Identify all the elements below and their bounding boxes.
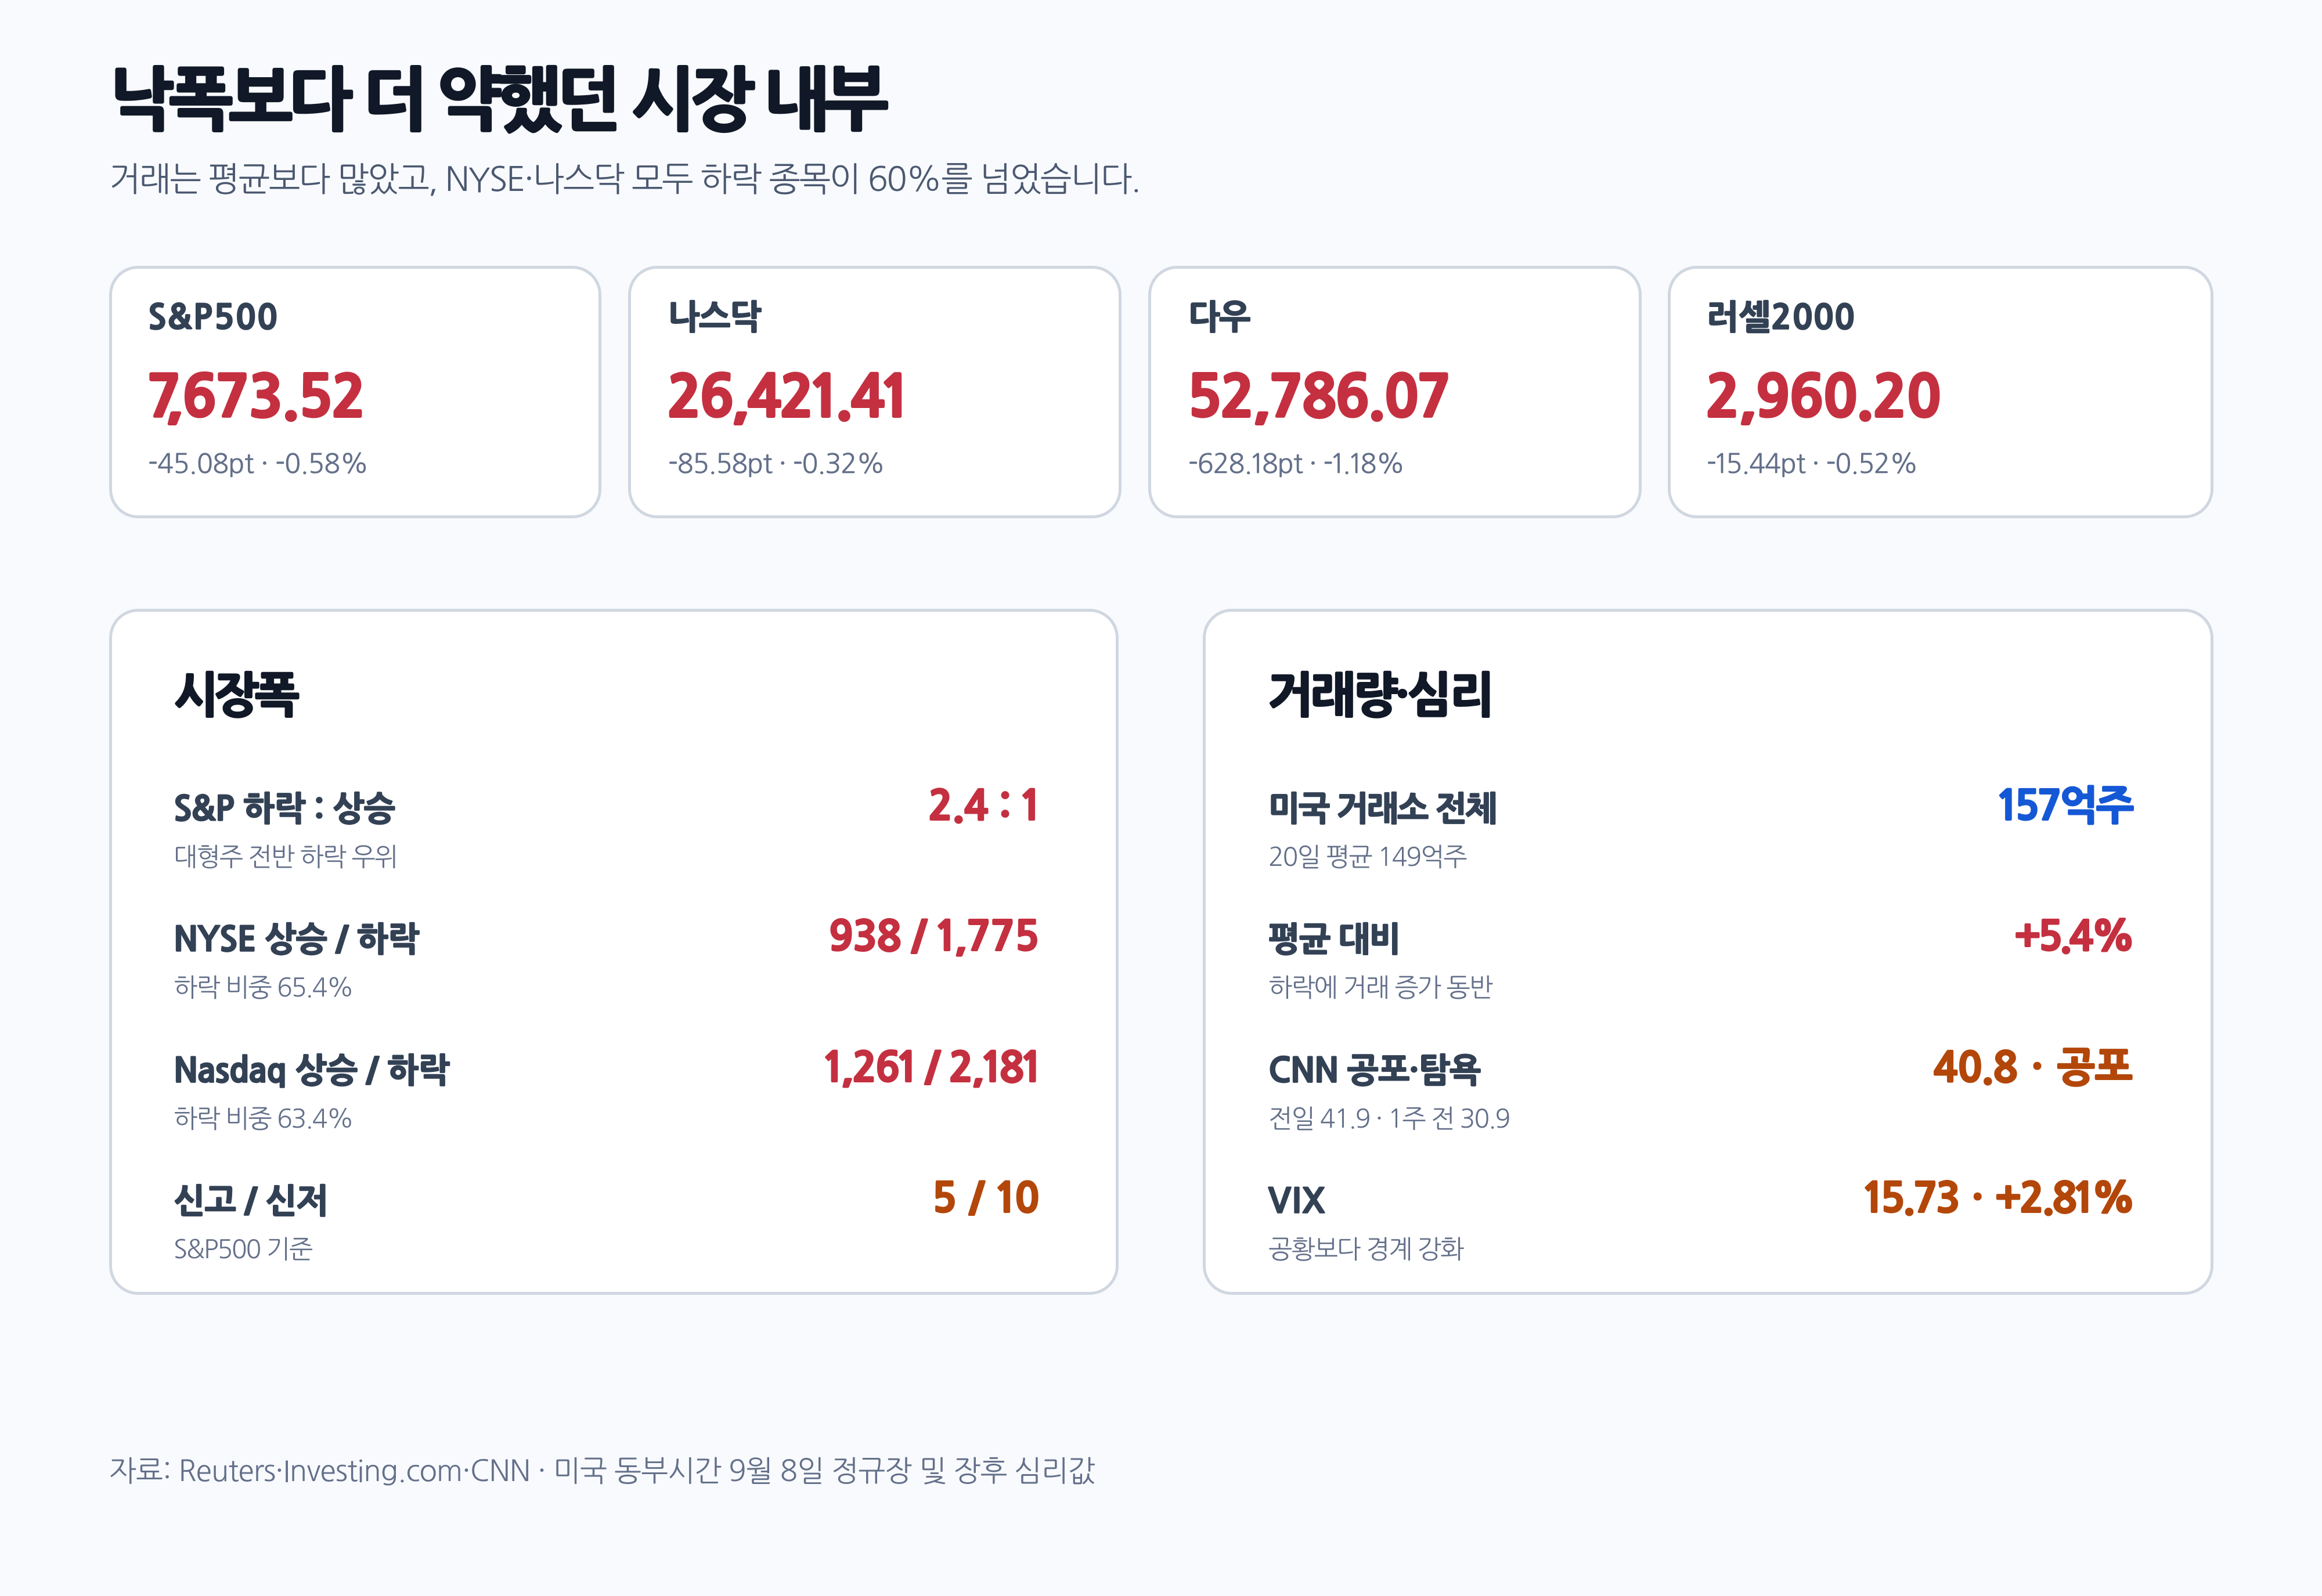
panel: volume and sentiment [1203,609,2213,1295]
row note: versus average: 하락에 거래 증가 동반 [1268,975,1492,1001]
change: Russell 2000: -15.44pt · -0.52% [1707,450,1918,477]
label: S&P500: S&P500 [148,301,279,334]
label: Dow: 다우 [1188,301,1250,334]
row label: VIX: VIX [1268,1185,1326,1218]
row value: Nasdaq: 1,261 / 2,181 [821,1048,1043,1088]
row label: CNN fear greed: CNN 공포·탐욕 [1268,1054,1480,1088]
row value: total volume: 157억주 [1995,786,2132,826]
row value: CNN fear greed: 40.8 · 공포 [1933,1048,2132,1088]
subtitle: 거래는 평균보다 많았고, NYSE·나스닥 모두 하락 종목이 60%를 넘었습니다. [109,163,1140,196]
source note: 자료: Reuters·Investing.com·CNN · 미국 동부시간 9월 8일 정규장 및 장후 심리값 [109,1457,1095,1486]
row note: S&P decline advance: 대형주 전반 하락 우위 [174,844,397,870]
heading: volume and sentiment: 거래량·심리 [1268,671,1492,719]
row note: CNN fear greed: 전일 41.9 · 1주 전 30.9 [1268,1106,1509,1132]
label: Nasdaq: 나스닥 [668,301,760,334]
row note: VIX: 공황보다 경계 강화 [1268,1237,1463,1262]
panel: Nasdaq card [628,266,1122,518]
panel: S&P500 card [109,266,601,518]
row value: versus average: +5.4% [2014,916,2132,957]
panel: Dow card [1148,266,1642,518]
row value: S&P decline advance: 2.4 : 1 [928,786,1043,826]
row label: Nasdaq: Nasdaq 상승 / 하락 [174,1054,449,1088]
value: Dow: 52,786.07 [1187,369,1450,425]
title: 낙폭보다 더 약했던 시장 내부 [109,66,884,134]
row note: Nasdaq: 하락 비중 63.4% [174,1106,353,1132]
row label: NYSE: NYSE 상승 / 하락 [174,923,419,956]
panel: Russell 2000 card [1668,266,2213,518]
row label: S&P decline advance: S&P 하락 : 상승 [174,792,395,826]
label: Russell 2000: 러셀2000 [1707,301,1855,334]
value: Nasdaq: 26,421.41 [667,369,911,425]
value: S&P500: 7,673.52 [147,369,365,425]
panel: market breadth [109,609,1119,1295]
row value: new highs lows: 5 / 10 [932,1178,1039,1219]
row value: NYSE: 938 / 1,775 [829,916,1039,957]
change: Nasdaq: -85.58pt · -0.32% [668,450,885,477]
change: S&P500: -45.08pt · -0.58% [148,450,369,477]
heading: market breadth: 시장폭 [174,671,295,719]
value: Russell 2000: 2,960.20 [1706,369,1940,425]
row note: total volume: 20일 평균 149억주 [1268,844,1466,870]
row label: new highs lows: 신고 / 신저 [174,1185,327,1218]
row label: total volume: 미국 거래소 전체 [1268,792,1496,826]
change: Dow: -628.18pt · -1.18% [1188,450,1405,477]
row note: NYSE: 하락 비중 65.4% [174,975,353,1001]
row value: VIX: 15.73 · +2.81% [1861,1178,2133,1219]
row label: versus average: 평균 대비 [1268,923,1400,956]
row note: new highs lows: S&P500 기준 [174,1237,312,1262]
